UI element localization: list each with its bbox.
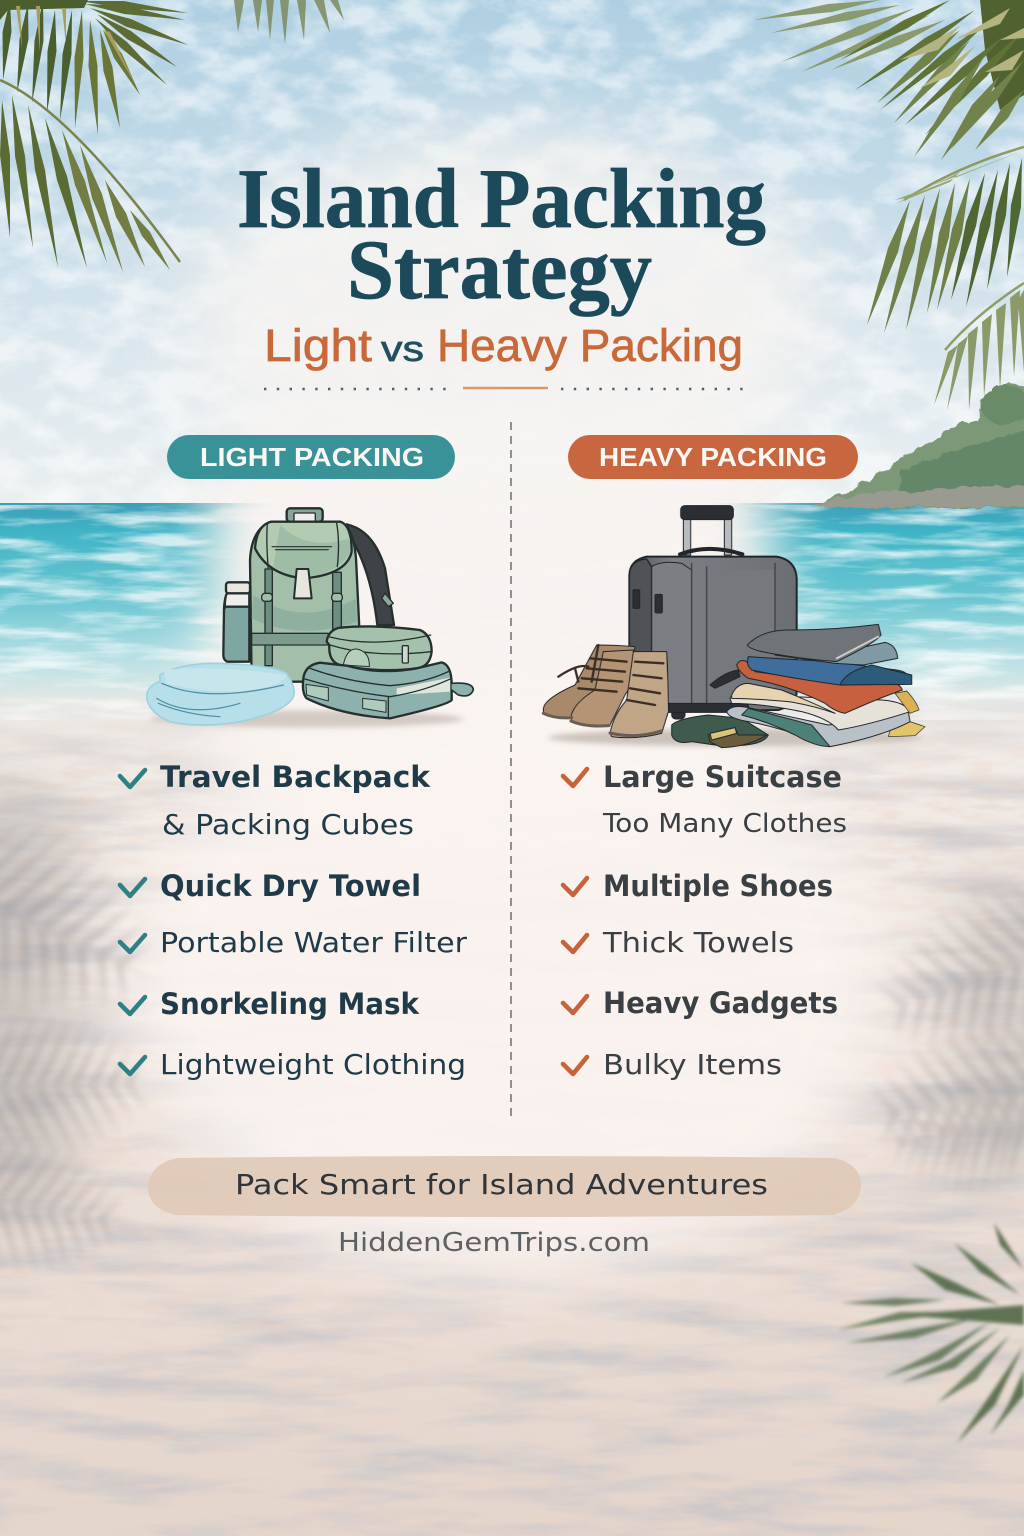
illustration: backpack, bottle, towel and cubes bbox=[147, 508, 473, 728]
island with trees bbox=[815, 383, 1024, 508]
list: light packing bbox=[120, 760, 468, 1081]
palm shadows on sand bbox=[0, 791, 1024, 1299]
item: travel backpack: & Packing Cubes bbox=[162, 808, 414, 841]
palm fronds: top left bbox=[0, 0, 344, 272]
item: quick dry towel: Quick Dry Towel bbox=[160, 869, 421, 903]
badge: heavy packing: HEAVY PACKING bbox=[599, 442, 827, 472]
item: multiple shoes: Multiple Shoes bbox=[603, 869, 833, 903]
subtitle: Light bbox=[264, 320, 373, 371]
footer banner bbox=[148, 1156, 861, 1217]
subtitle: vs bbox=[381, 328, 424, 369]
website credit: HiddenGemTrips.com bbox=[338, 1228, 650, 1258]
subtitle bbox=[264, 320, 743, 371]
illustration: suitcase, boots and clothes pile bbox=[543, 506, 925, 748]
item: large suitcase: Too Many Clothes bbox=[602, 809, 847, 839]
item: thick towels: Thick Towels bbox=[602, 926, 794, 959]
badge: heavy packing bbox=[568, 435, 858, 479]
item: large suitcase: Large Suitcase bbox=[603, 760, 842, 794]
title divider bbox=[264, 388, 745, 389]
item: large suitcase bbox=[563, 760, 847, 839]
decorative sea bbox=[0, 503, 1024, 758]
item: snorkeling mask: Snorkeling Mask bbox=[160, 987, 420, 1021]
item: travel backpack bbox=[120, 760, 431, 841]
column divider bbox=[510, 422, 512, 1120]
title: Strategy bbox=[347, 223, 652, 317]
footer banner: Pack Smart for Island Adventures bbox=[235, 1168, 768, 1201]
item: portable water filter: Portable Water Filter bbox=[160, 926, 468, 959]
item: lightweight clothing: Lightweight Clothing bbox=[160, 1048, 466, 1081]
title: Island Packing bbox=[237, 152, 766, 246]
item: travel backpack: Travel Backpack bbox=[160, 760, 431, 794]
badge: light packing: LIGHT PACKING bbox=[200, 442, 424, 472]
palm frond: bottom right bbox=[837, 1223, 1024, 1443]
badge: light packing bbox=[167, 435, 455, 479]
item: bulky items: Bulky Items bbox=[603, 1048, 782, 1081]
palm fronds: top right bbox=[754, 0, 1024, 410]
subtitle: Heavy Packing bbox=[437, 320, 743, 371]
title bbox=[237, 152, 766, 317]
list: heavy packing bbox=[563, 760, 847, 1081]
item: heavy gadgets: Heavy Gadgets bbox=[603, 986, 838, 1020]
